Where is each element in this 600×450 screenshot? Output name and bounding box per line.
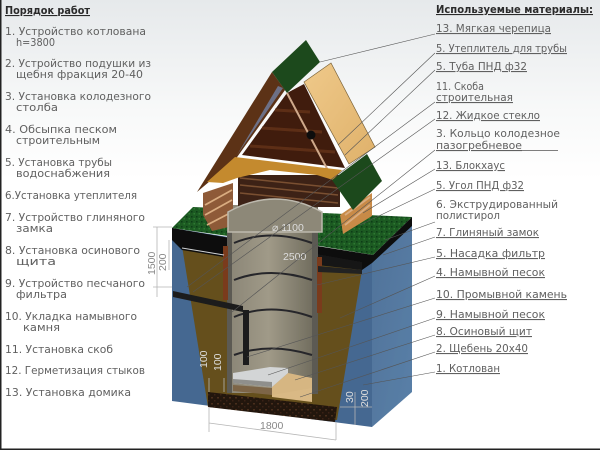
dimension labels: 30 bbox=[344, 391, 356, 403]
list of materials bbox=[436, 22, 567, 375]
list of work steps: фильтра bbox=[16, 288, 67, 301]
list of materials: 2. Щебень 20х40 bbox=[436, 342, 528, 355]
dimension labels: 100 bbox=[198, 350, 210, 368]
list of work steps: 3. Установка колодезного bbox=[5, 90, 151, 103]
list of materials: 13. Мягкая черепица bbox=[436, 22, 551, 35]
roof gable bbox=[197, 72, 345, 192]
list of materials: 4. Намывной песок bbox=[436, 266, 545, 279]
list of work steps: щита bbox=[16, 255, 56, 268]
dimension labels bbox=[146, 222, 371, 432]
list of work steps: столба bbox=[16, 101, 58, 114]
list of materials: 5. Угол ПНД ф32 bbox=[436, 179, 524, 192]
dimension lines bbox=[153, 227, 372, 440]
list of materials: 9. Намывной песок bbox=[436, 308, 545, 321]
front face of the ground block bbox=[172, 228, 372, 427]
wooden roof eave bbox=[207, 157, 342, 183]
list of work steps: щебня фракция 20-40 bbox=[16, 68, 143, 81]
list of materials: строительная bbox=[436, 91, 513, 104]
list of work steps: строительным bbox=[16, 134, 100, 147]
list of materials: 3. Кольцо колодезное bbox=[436, 127, 560, 140]
dimension labels: 2500 bbox=[283, 251, 307, 263]
list of work steps: 10. Укладка намывного bbox=[5, 310, 137, 323]
dimension labels: ⌀ 1100 bbox=[272, 222, 304, 234]
upper soft shingle roof bbox=[272, 40, 320, 93]
dimension labels: 1800 bbox=[260, 420, 284, 432]
list of work steps: 7. Устройство глиняного bbox=[5, 211, 145, 224]
list of materials: полистирол bbox=[436, 209, 500, 222]
dimension labels: 1500 bbox=[146, 251, 158, 275]
list of materials: 10. Промывной камень bbox=[436, 288, 567, 301]
list of materials: 11. Скоба bbox=[436, 80, 484, 93]
underline extension below ring label bbox=[522, 150, 558, 152]
list of work steps: 8. Установка осинового bbox=[5, 244, 140, 257]
concrete well ring interior bbox=[228, 205, 318, 393]
leader lines bbox=[187, 34, 435, 397]
list of work steps: 4. Обсыпка песком bbox=[5, 123, 117, 136]
list of materials: пазогребневое bbox=[436, 139, 522, 152]
list of materials: 5. Туба ПНД ф32 bbox=[436, 60, 527, 73]
list of work steps: 2. Устройство подушки из bbox=[5, 57, 151, 70]
dimension labels: 100 bbox=[212, 353, 224, 371]
dimension labels: 200 bbox=[157, 253, 169, 271]
steel brackets bbox=[234, 236, 312, 355]
insulation strips bbox=[223, 246, 322, 313]
clay seal black band bbox=[172, 217, 412, 270]
list of materials: 13. Блокхаус bbox=[436, 159, 505, 172]
list of materials: 8. Осиновый щит bbox=[436, 325, 533, 338]
list of materials: 1. Котлован bbox=[436, 362, 500, 375]
list of work steps: 6.Установка утеплителя bbox=[5, 189, 137, 202]
panel: work order bbox=[5, 4, 151, 399]
list of materials: 7. Глиняный замок bbox=[436, 226, 539, 239]
panel: materials used bbox=[436, 3, 593, 375]
water pipes and filter nozzle bbox=[173, 248, 362, 365]
house log walls bbox=[203, 175, 372, 234]
dimension labels: 200 bbox=[359, 389, 371, 407]
well ring top edge inside the house bbox=[228, 199, 322, 232]
list of work steps: 12. Герметизация стыков bbox=[5, 364, 145, 377]
list of work steps: 13. Установка домика bbox=[5, 386, 131, 399]
heading: work order: Порядок работ bbox=[5, 4, 91, 17]
right side face of the ground block bbox=[372, 220, 412, 427]
list of work steps: 1. Устройство котлована bbox=[5, 25, 146, 38]
list of materials: 12. Жидкое стекло bbox=[436, 109, 540, 122]
filter layers at the bottom of the well bbox=[233, 367, 312, 402]
list of materials: 5. Утеплитель для трубы bbox=[436, 42, 567, 55]
list of work steps: h=3800 bbox=[16, 36, 55, 49]
list of work steps bbox=[5, 25, 151, 399]
list of work steps: водоснабжения bbox=[16, 167, 110, 180]
list of materials: 5. Насадка фильтр bbox=[436, 247, 545, 260]
list of work steps: 5. Установка трубы bbox=[5, 156, 112, 169]
list of work steps: 11. Установка скоб bbox=[5, 343, 113, 356]
list of work steps: замка bbox=[16, 222, 53, 235]
list of work steps: камня bbox=[23, 321, 60, 334]
well cross-section illustration bbox=[146, 40, 412, 440]
excavation pit filled with sand bbox=[182, 246, 362, 420]
lower soft shingle roof bbox=[332, 154, 382, 210]
grass surface bbox=[172, 207, 412, 255]
gravel base layer bbox=[208, 392, 337, 422]
list of work steps: 9. Устройство песчаного bbox=[5, 277, 145, 290]
list of materials: 6. Экструдированный bbox=[436, 198, 558, 211]
pale wood roof panel bbox=[304, 63, 375, 164]
well ring wall edges bbox=[227, 222, 318, 394]
